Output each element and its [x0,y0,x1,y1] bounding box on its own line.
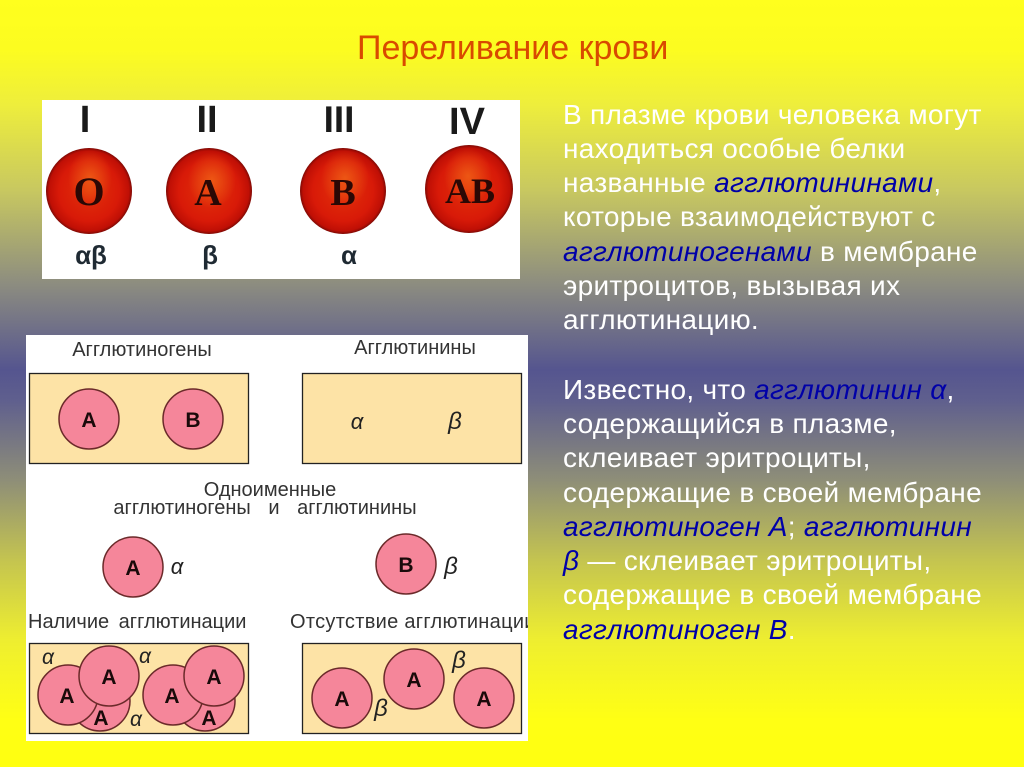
text block: alpha and beta agglutinins: содержащийся в плазме, [563,408,897,439]
group II: II [196,99,218,141]
text block: agglutinins intro: эритроцитов, вызывая их [563,270,900,301]
text block: alpha and beta agglutinins [562,374,982,645]
group I: O [73,169,105,214]
text block: agglutinins intro: находиться особые белки [563,133,905,164]
pair: B beta [376,534,458,594]
text block: alpha and beta agglutinins: склеивает эритроциты, [563,442,871,473]
heading: agglutination present: Наличие агглютинации [28,611,246,633]
text block: agglutinins intro [563,99,982,335]
text block: alpha and beta agglutinins: содержащие в своей мембране [563,477,982,508]
box: agglutination absent: β [451,647,466,674]
heading: same-name: агглютиногены и агглютинины [113,497,417,519]
text block: alpha and beta agglutinins: Известно, что агглютинин α, [563,374,955,405]
group III: III [324,99,354,140]
box: agglutination present: A [164,685,180,708]
box: agglutination present: α [130,708,143,731]
box: agglutination absent [302,644,522,734]
panel: blood groups [42,99,520,279]
text block: agglutinins intro: агглютиногенами в мембране [563,236,978,267]
pair: B beta: B [398,554,414,577]
text block: agglutinins intro: названные агглютининами, [563,167,941,198]
box: agglutinins: α [351,409,365,434]
heading: agglutinins: Агглютинины [354,337,476,359]
heading: same-name [114,482,416,514]
panel: agglutination diagram [26,335,536,741]
group IV: AB [445,171,495,211]
box: agglutination present: A [59,685,75,708]
text block: agglutinins intro: В плазме крови человека могут [563,99,982,130]
heading: agglutinogens: Агглютиногены [72,339,212,361]
pair: A alpha: α [171,554,185,579]
text block: alpha and beta agglutinins: β — склеивает эритроциты, [563,545,931,576]
group III [300,99,386,270]
box: agglutination present: A [201,707,217,730]
group II: β [202,240,218,270]
box: agglutinogens: B [185,409,201,432]
box: agglutination present: A [93,707,109,730]
text block: alpha and beta agglutinins: содержащие в своей мембране [563,579,982,610]
text block: alpha and beta agglutinins: агглютиноген В. [563,614,796,645]
title: Переливание крови [357,29,668,67]
box: agglutination absent: β [373,695,388,722]
group I: αβ [75,240,107,270]
pair: A alpha: A [125,557,141,580]
box: agglutination present: α [42,646,55,669]
text block: alpha and beta agglutinins: агглютиноген А; агглютинин [563,511,972,542]
box: agglutination present: A [206,666,222,689]
group I [46,99,132,270]
pair: B beta: β [443,553,458,580]
group III: B [330,172,356,214]
group II: A [194,172,222,214]
box: agglutination present: α [139,645,152,668]
box: agglutinogens: A [81,409,97,432]
heading: agglutination absent: Отсутствие агглютинации [290,611,536,633]
group III: α [341,240,357,270]
pair: A alpha [103,537,185,597]
group I: I [80,99,90,141]
box: agglutination absent: A [334,688,350,711]
box: agglutination present [30,644,248,734]
text block: agglutinins intro: которые взаимодействуют с [563,201,936,232]
group IV: IV [449,101,486,143]
group IV [425,101,513,233]
box: agglutination absent: A [476,688,492,711]
box: agglutination present: A [101,666,117,689]
box: agglutinins: β [447,408,462,435]
box: agglutinins [302,374,522,464]
box: agglutinogens [30,374,248,464]
group II [166,99,252,270]
box: agglutination absent: A [406,669,422,692]
heading: same-name: Одноименные [204,479,336,501]
text block: agglutinins intro: агглютинацию. [563,304,759,335]
